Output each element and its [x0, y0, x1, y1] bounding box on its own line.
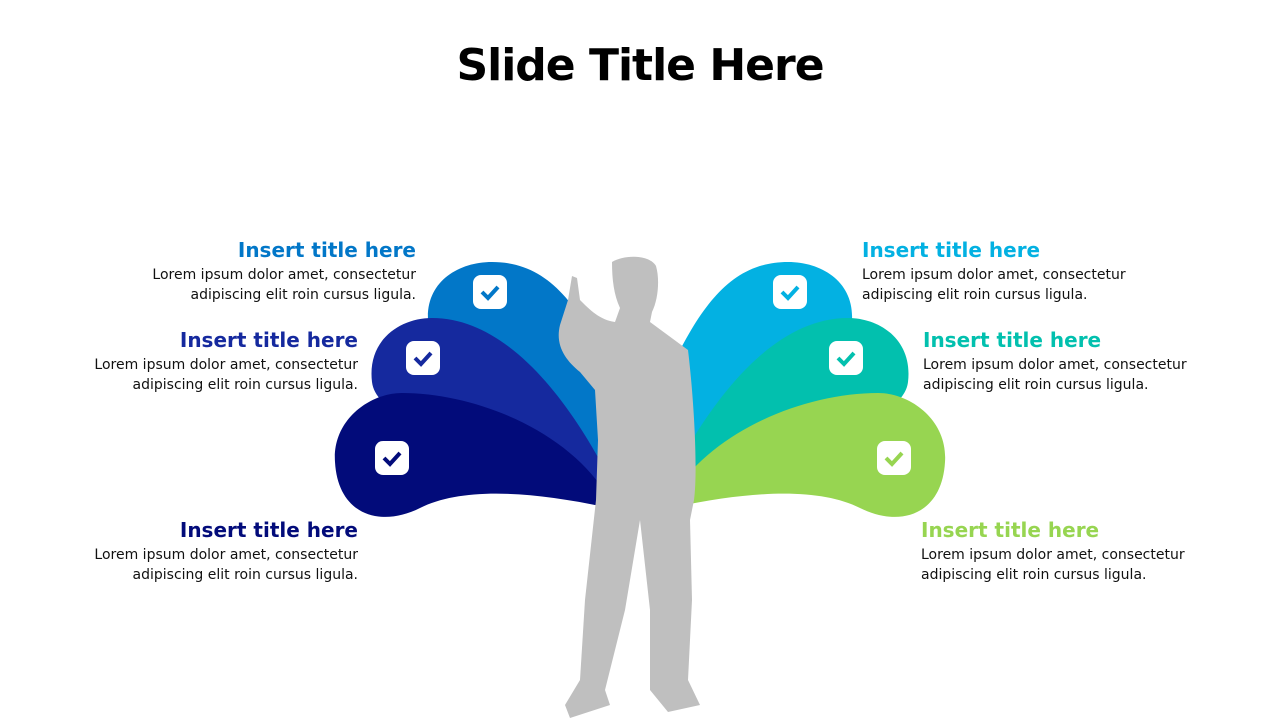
text: right middle — [923, 328, 1187, 393]
person silhouette — [559, 257, 700, 718]
title: Slide Title Here — [456, 40, 824, 91]
text: left bottom: Lorem ipsum dolor amet, consectetur — [94, 547, 358, 563]
text: right top — [862, 238, 1126, 303]
text: right top: adipiscing elit roin cursus ligula. — [862, 287, 1087, 303]
petal: left top — [428, 262, 605, 490]
text: left top: Lorem ipsum dolor amet, consectetur — [152, 267, 416, 283]
text: right bottom: Lorem ipsum dolor amet, consectetur — [921, 547, 1185, 563]
text: left middle: Lorem ipsum dolor amet, consectetur — [94, 357, 358, 373]
text: left top — [152, 238, 416, 303]
petal: right top — [675, 262, 852, 490]
petal: right middle — [675, 318, 909, 500]
petal: left bottom — [335, 393, 605, 517]
text: left top: Insert title here — [238, 238, 416, 262]
text: right bottom: Insert title here — [921, 518, 1099, 542]
text: right middle: adipiscing elit roin cursus ligula. — [923, 377, 1148, 393]
petal: left middle — [371, 318, 605, 500]
text: right middle: Lorem ipsum dolor amet, consectetur — [923, 357, 1187, 373]
text: right top: Lorem ipsum dolor amet, consectetur — [862, 267, 1126, 283]
text: left top: adipiscing elit roin cursus ligula. — [191, 287, 416, 303]
text: right top: Insert title here — [862, 238, 1040, 262]
petal: right bottom — [675, 393, 945, 517]
text: left bottom: adipiscing elit roin cursus ligula. — [133, 567, 358, 583]
text: right bottom — [921, 518, 1185, 583]
text: left middle — [94, 328, 358, 393]
text: left bottom: Insert title here — [180, 518, 358, 542]
text: right middle: Insert title here — [923, 328, 1101, 352]
text: right bottom: adipiscing elit roin cursus ligula. — [921, 567, 1146, 583]
text: left middle: Insert title here — [180, 328, 358, 352]
text: left middle: adipiscing elit roin cursus ligula. — [133, 377, 358, 393]
text: left bottom — [94, 518, 358, 583]
checkbox icons — [375, 275, 911, 475]
